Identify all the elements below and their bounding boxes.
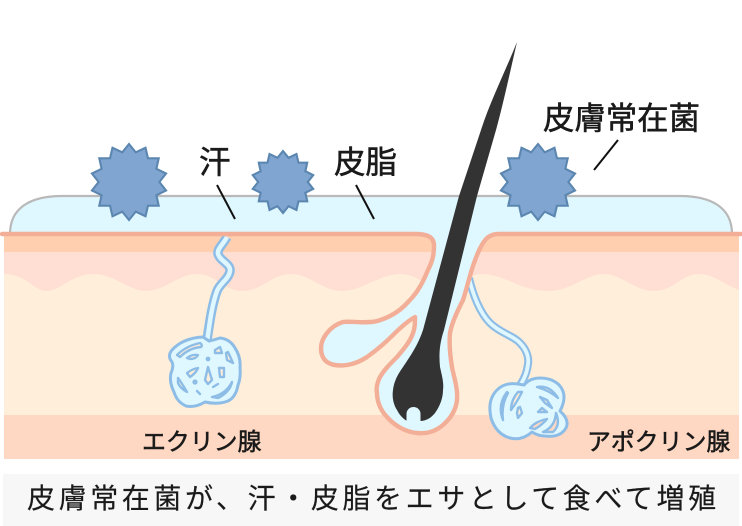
hair follicle and sebaceous gland [2, 234, 741, 433]
leader line: sebum [356, 185, 374, 219]
eccrine coil [170, 337, 240, 406]
leader line: skin microbes [594, 140, 618, 170]
sebum and sweat film on skin surface [10, 196, 732, 234]
label: skin microbes: 皮膚常在菌 [543, 101, 700, 136]
hair papilla [406, 407, 420, 422]
caption text: 皮膚常在菌が、汗・皮脂をエサとして食べて増殖 [27, 483, 720, 514]
microbe 3 [501, 144, 575, 220]
hair shaft and bulb [393, 42, 517, 421]
layer: lower epidermis [4, 252, 739, 294]
apocrine coil [490, 378, 567, 439]
leader line: sweat [217, 185, 235, 219]
layer: upper epidermis [4, 234, 739, 252]
skin layers [4, 234, 739, 459]
label: apocrine gland: アポクリン腺 [587, 429, 730, 456]
eccrine duct [207, 237, 230, 342]
layer: dermis [4, 274, 739, 416]
apocrine sweat gland [469, 278, 567, 439]
microbe 2 [253, 151, 313, 213]
caption bar [3, 474, 739, 526]
label: sebum: 皮脂 [334, 144, 397, 180]
layer: subcutis [4, 415, 739, 459]
eccrine coil loops [177, 343, 233, 398]
microbe 1 [92, 144, 166, 220]
eccrine sweat gland [170, 237, 240, 406]
label: eccrine gland: エクリン腺 [142, 429, 262, 456]
label: sweat: 汗 [199, 144, 231, 180]
apocrine coil loops [501, 387, 558, 432]
apocrine duct [469, 278, 528, 387]
caption background [3, 474, 739, 526]
